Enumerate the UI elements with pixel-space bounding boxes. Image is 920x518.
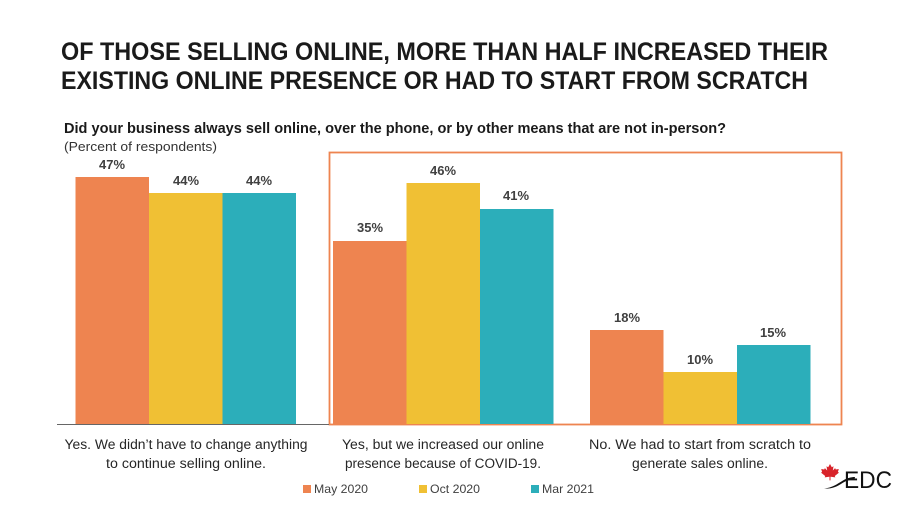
value labels: 35% xyxy=(357,220,383,235)
category labels: No. We had to start from scratch to xyxy=(589,437,811,452)
legend xyxy=(303,482,594,496)
value labels xyxy=(99,157,786,367)
legend: May 2020 xyxy=(314,482,368,496)
category labels: Yes, but we increased our online xyxy=(342,437,544,452)
value labels: 18% xyxy=(614,310,640,325)
legend: Oct 2020 xyxy=(430,482,480,496)
category labels: generate sales online. xyxy=(632,456,768,471)
unit note: (Percent of respondents) xyxy=(64,139,217,154)
group: yes, increased xyxy=(333,183,554,424)
group: yes, no change xyxy=(76,177,296,424)
value labels: 44% xyxy=(246,173,272,188)
title: EXISTING ONLINE PRESENCE OR HAD TO START FROM SCRATCH xyxy=(61,67,808,95)
category labels: to continue selling online. xyxy=(106,456,266,471)
icon: EDC logo: EDC xyxy=(844,467,892,494)
value labels: 47% xyxy=(99,157,125,172)
survey question: Did your business always sell online, over the phone, or by other means that are not in-person? xyxy=(64,121,726,137)
legend: Mar 2021 xyxy=(542,482,594,496)
icon: EDC logo xyxy=(821,464,892,494)
value labels: 15% xyxy=(760,325,786,340)
category labels xyxy=(64,437,811,471)
value labels: 46% xyxy=(430,163,456,178)
value labels: 44% xyxy=(173,173,199,188)
bar chart xyxy=(57,177,810,424)
value labels: 41% xyxy=(503,188,529,203)
group: no, started from scratch xyxy=(590,330,810,424)
category labels: Yes. We didn’t have to change anything xyxy=(64,437,308,452)
title xyxy=(61,38,828,95)
highlight box xyxy=(330,152,842,424)
value labels: 10% xyxy=(687,352,713,367)
title: OF THOSE SELLING ONLINE, MORE THAN HALF INCREASED THEIR xyxy=(61,38,828,66)
category labels: presence because of COVID-19. xyxy=(345,456,541,471)
